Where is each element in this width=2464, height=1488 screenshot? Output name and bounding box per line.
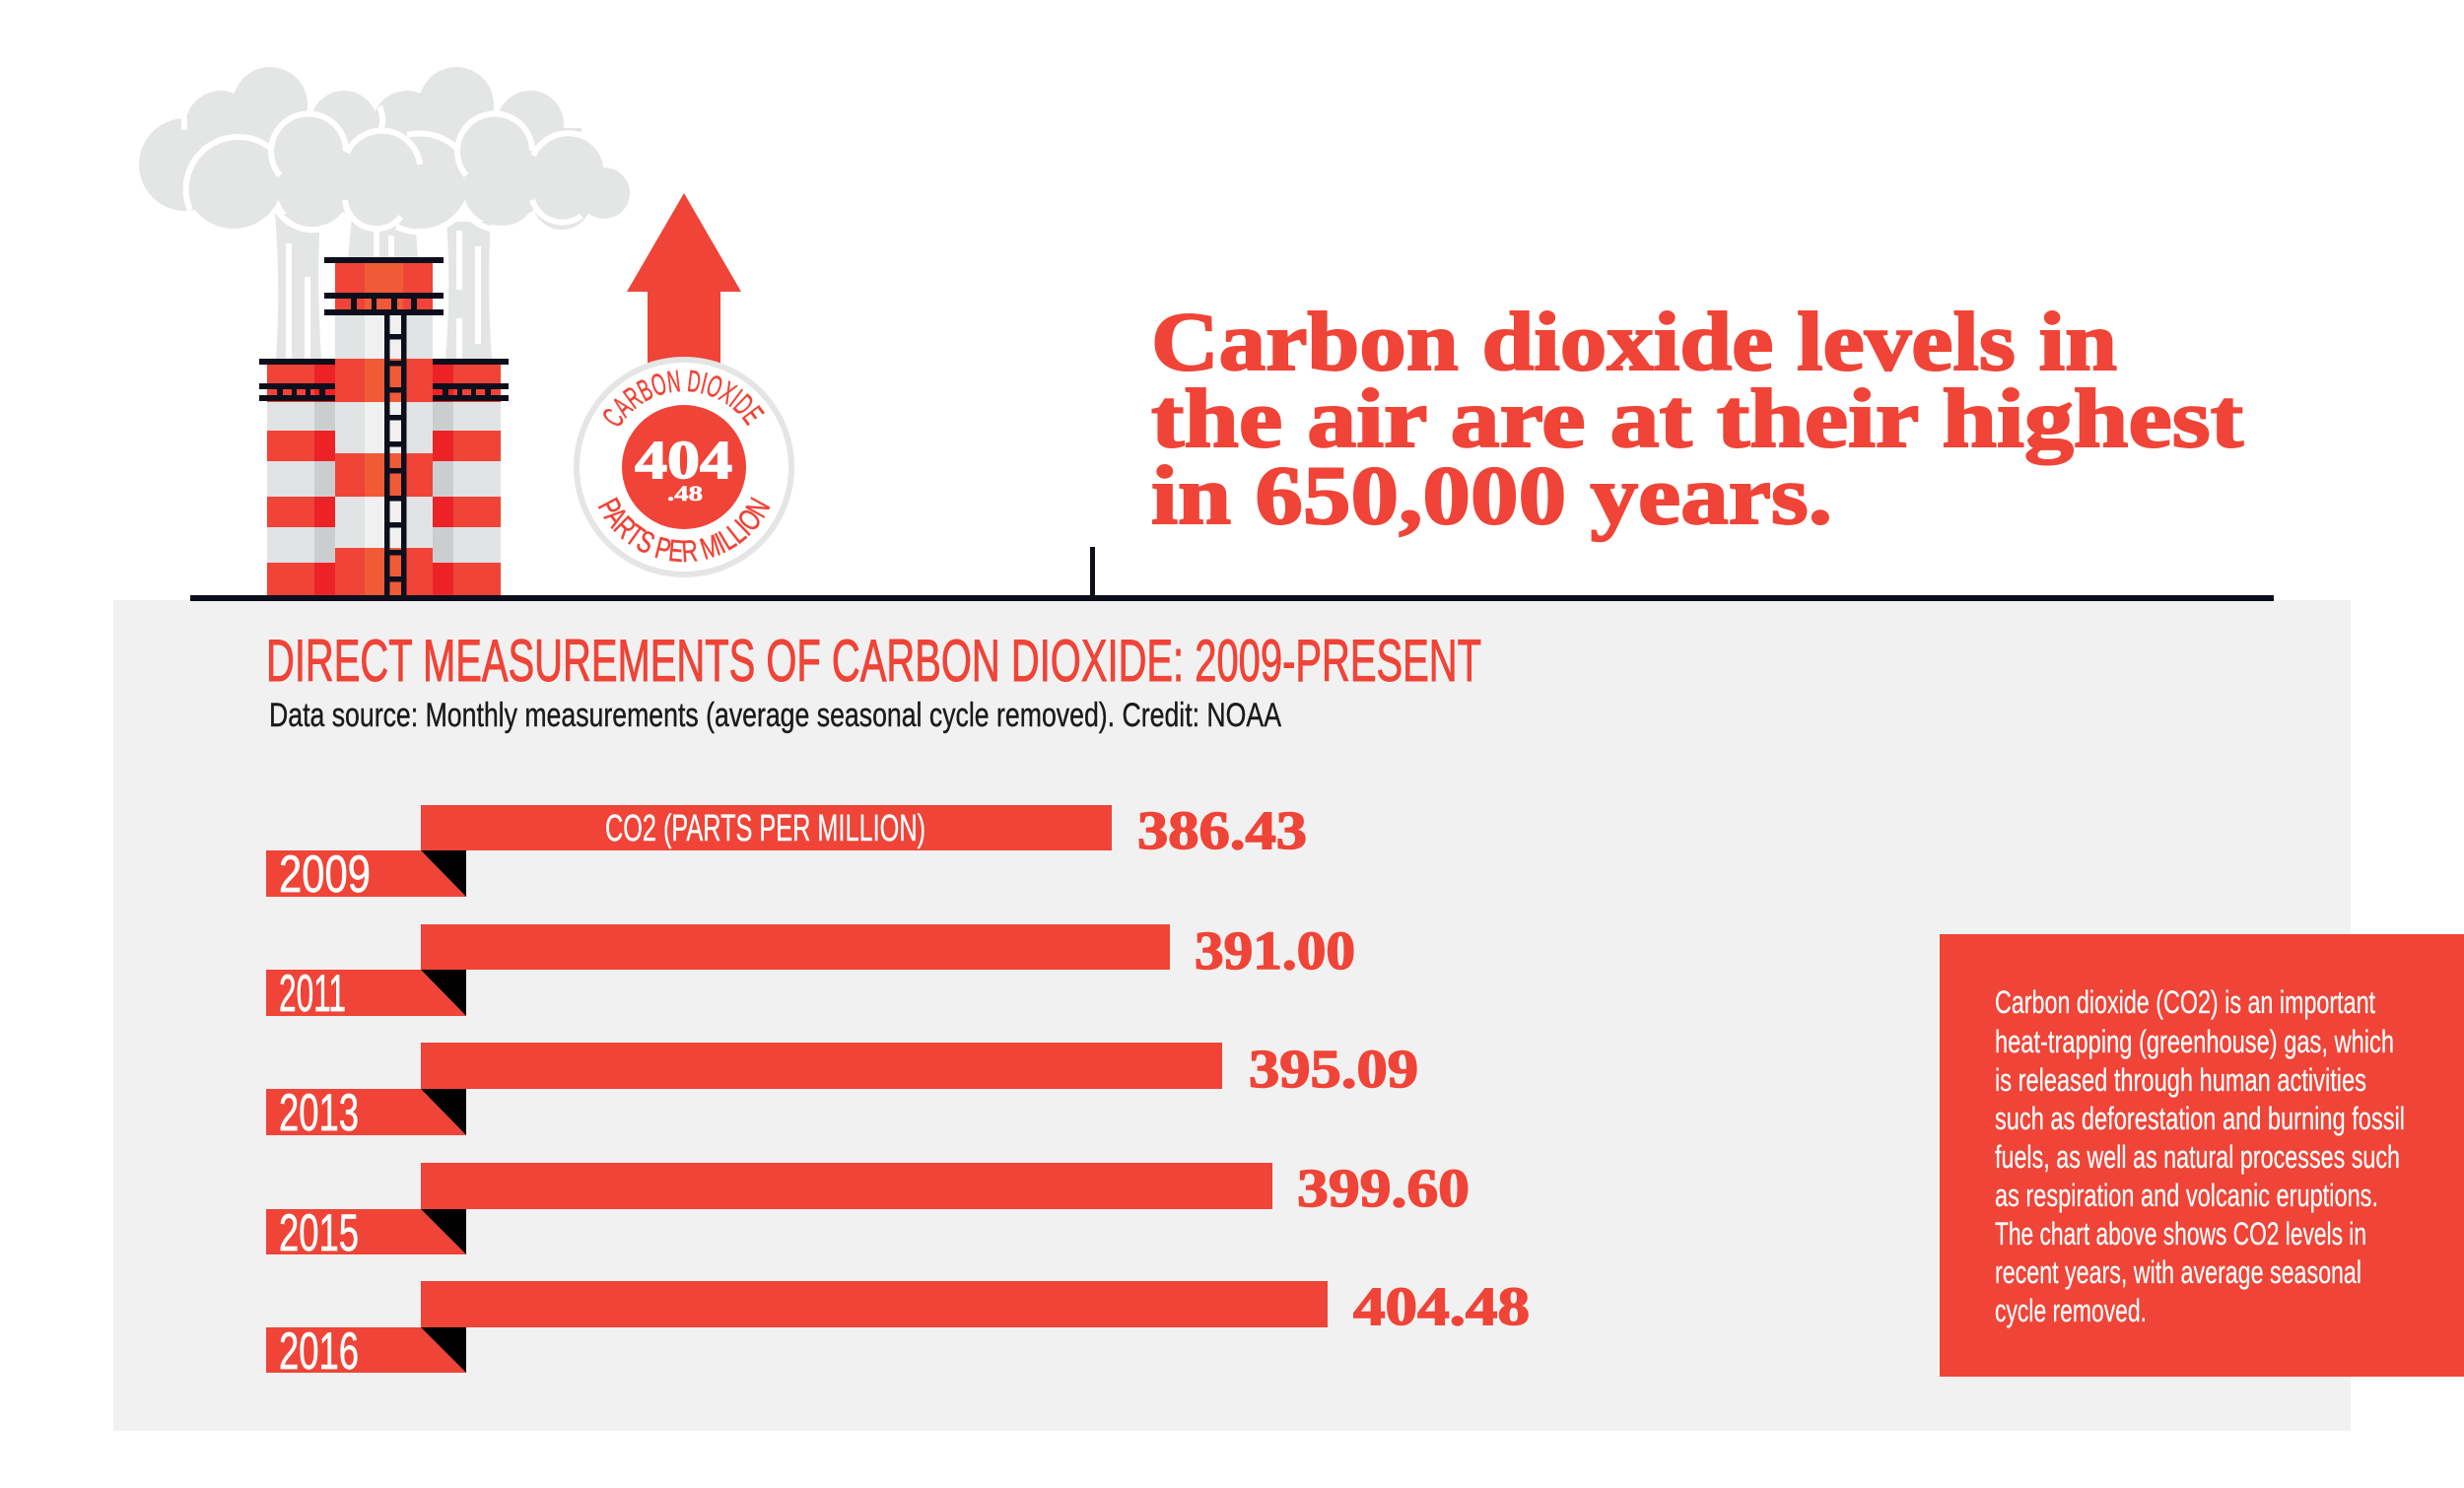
row: 2009	[266, 800, 1307, 904]
row: 2015	[266, 1158, 1470, 1262]
panel: chart background	[113, 600, 2351, 1431]
row: 2011: 391.00	[1195, 920, 1355, 981]
row: 2016	[266, 1276, 1530, 1381]
ground line	[190, 595, 2274, 601]
callout: explanation	[1940, 934, 2464, 1377]
badge: 404.48 parts per million: .48	[667, 481, 703, 506]
headline: Carbon dioxide levels in	[1151, 296, 2117, 388]
chart source note: Data source: Monthly measurements (average seasonal cycle removed). Credit: NOAA	[269, 697, 1281, 734]
row: 2016: 404.48	[1353, 1276, 1530, 1336]
row: 2011	[266, 920, 1355, 1023]
row: 2013: 395.09	[1249, 1039, 1418, 1099]
chart heading: DIRECT MEASUREMENTS OF CARBON DIOXIDE: 2009-PRESENT	[266, 628, 1481, 694]
row: 2016: 2016	[279, 1322, 359, 1381]
headline: the air are at their highest	[1151, 372, 2243, 465]
row: 2009: 2009	[279, 845, 371, 904]
row: 2013	[266, 1039, 1418, 1142]
badge: 404.48 parts per million	[574, 357, 794, 577]
row: 2013: 2013	[279, 1084, 359, 1142]
illustration: power plant with smoke	[139, 67, 630, 595]
headline: in 650,000 years.	[1151, 449, 1832, 542]
arrow: rising levels	[627, 193, 741, 367]
row: 2011: 2011	[279, 965, 346, 1023]
headline	[1151, 296, 2243, 542]
callout: explanation: cycle removed.	[1995, 1293, 2147, 1328]
row: 2009: 386.43	[1137, 800, 1307, 860]
smoke stalks	[275, 214, 492, 359]
right tower	[433, 359, 509, 595]
smoke cloud	[139, 67, 630, 233]
badge: 404.48 parts per million: 404	[635, 430, 732, 490]
center tower with ladder	[324, 257, 444, 595]
row: 2015: 2015	[279, 1204, 359, 1262]
row: 2015: 399.60	[1297, 1158, 1470, 1218]
badge: 404.48 parts per million: PARTS PER MILLION	[597, 497, 771, 562]
badge: 404.48 parts per million: CARBON DIOXIDE	[603, 371, 765, 426]
divider tick	[1090, 547, 1095, 596]
left tower	[259, 359, 335, 595]
row: 2009: CO2 (PARTS PER MILLION)	[605, 808, 925, 849]
bar chart: CO2 by year	[266, 800, 1530, 1381]
